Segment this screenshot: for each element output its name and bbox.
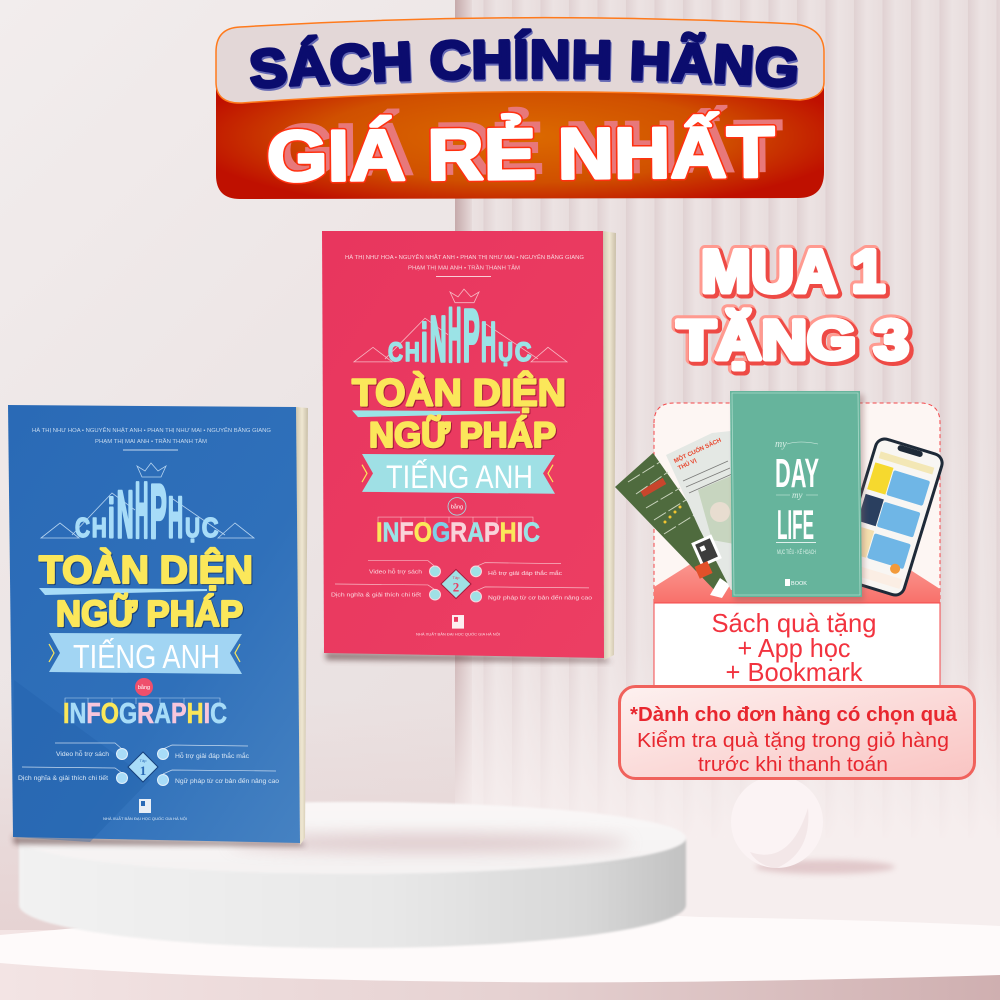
callout: gift notice — [620, 686, 974, 778]
red feature list: Video hỗ trợ sách — [369, 568, 422, 575]
red title: CHINH PHỤC: C — [515, 337, 531, 367]
feature list: Tập — [140, 758, 147, 763]
icon: green notebook: DAY — [775, 450, 819, 496]
floor — [0, 911, 1000, 1000]
ribbon: TIẾNG ANH: TIẾNG ANH — [73, 638, 220, 675]
gift caption panel — [654, 603, 940, 687]
blue book: volume 1 — [8, 405, 308, 846]
title: CHINH PHỤC: P — [150, 469, 167, 553]
red feature list: 2 — [453, 581, 459, 595]
heading: GIÁ RẺ NHẤT: GIÁ RẺ NHẤT — [266, 111, 775, 196]
red badge: bằng: bằng — [451, 503, 463, 510]
title: NGỮ PHÁP: NGỮ PHÁP — [56, 592, 243, 634]
icon: green notebook: MỤC TIÊU - KẾ HOẠCH — [777, 548, 816, 556]
red title: CHINH PHỤC: Ụ — [498, 338, 513, 368]
red crown and roof lines — [354, 289, 567, 362]
blue cover contents — [18, 427, 280, 821]
title: CHINH PHỤC: i — [108, 488, 115, 549]
badge: bằng — [135, 678, 153, 696]
red badge: bằng — [448, 498, 466, 515]
red book: volume 2 — [322, 231, 616, 662]
authors — [32, 427, 271, 450]
title: CHINH PHỤC — [75, 468, 218, 555]
feature list: Ngữ pháp từ cơ bản đến nâng cao — [175, 779, 280, 785]
title: CHINH PHỤC: H — [92, 513, 107, 544]
title: CHINH PHỤC: H — [135, 468, 148, 555]
red title: CHINH PHỤC: P — [463, 295, 480, 377]
icon: green notebook: my — [775, 439, 787, 450]
red ribbon: TIẾNG ANH: TIẾNG ANH — [386, 458, 533, 495]
authors: HÀ THỊ NHƯ HOA • NGUYỄN NHẬT ANH • PHAN THỊ NHƯ MAI • NGUYỄN BĂNG GIANG — [32, 427, 271, 434]
icon: photo bookmark: THÚ VỊ — [677, 457, 698, 472]
gift panel card — [654, 403, 940, 603]
title: CHINH PHỤC: C — [75, 513, 90, 544]
red publisher — [416, 615, 500, 636]
callout: gift notice: *Dành cho đơn hàng có chọn quà — [630, 703, 958, 726]
banner grey upper panel — [216, 18, 824, 103]
heading: GIÁ RẺ NHẤT: GIÁ RẺ NHẤT — [266, 111, 775, 196]
red authors: HÀ THỊ NHƯ HOA • NGUYỄN NHẬT ANH • PHAN THỊ NHƯ MAI • NGUYỄN BĂNG GIANG — [345, 254, 584, 261]
title: TOÀN DIỆN: TOÀN DIỆN — [39, 548, 253, 592]
heading: TẶNG 3: TẶNG 3 — [677, 308, 909, 371]
feature list: Hỗ trợ giải đáp thắc mắc — [175, 753, 249, 760]
title: CHINH PHỤC: H — [168, 486, 183, 550]
banner red lower panel — [216, 60, 824, 199]
red book shadow — [325, 652, 612, 662]
red feature list: Dịch nghĩa & giải thích chi tiết — [331, 593, 421, 599]
heading: TẶNG 3: TẶNG 3 — [677, 308, 909, 371]
red title: CHINH PHỤC — [388, 292, 531, 377]
heading: SÁCH CHÍNH HÃNG: SÁCH CHÍNH HÃNG — [250, 28, 798, 91]
icon: green notebook: BOOK — [791, 581, 808, 587]
heading: MUA 1: MUA 1 — [701, 238, 885, 305]
icon: green bookmark — [615, 453, 735, 598]
panel: gifts — [615, 391, 946, 687]
blue cover — [8, 405, 300, 843]
feature list — [18, 743, 280, 786]
gift caption panel: Sách quà tặng — [712, 608, 876, 638]
feature list: 1 — [140, 763, 146, 778]
red title underline — [352, 410, 520, 417]
red title: CHINH PHỤC: i — [421, 313, 428, 372]
red title: TOÀN DIỆN: TOÀN DIỆN — [352, 371, 566, 414]
red cover — [322, 231, 604, 658]
red book pages — [603, 231, 616, 660]
red feature list: Ngữ pháp từ cơ bản đến nâng cao — [488, 596, 593, 601]
icon: photo bookmark: MỘT CUỐN SÁCH — [672, 436, 722, 465]
icon: green notebook — [730, 391, 864, 601]
red authors — [345, 254, 584, 277]
feature list: Video hỗ trợ sách — [56, 751, 109, 758]
publisher: NHÀ XUẤT BẢN ĐẠI HỌC QUỐC GIA HÀ NỘI — [103, 816, 187, 821]
envelope flap — [654, 497, 940, 603]
callout: gift notice: Kiểm tra quà tặng trong giỏ hàng — [637, 729, 949, 752]
red title: CHINH PHỤC: H — [448, 292, 461, 377]
badge: bằng: bằng — [138, 684, 150, 691]
red authors: PHẠM THỊ MAI ANH • TRẦN THANH TÂM — [408, 265, 521, 272]
book shadow — [13, 836, 306, 846]
icon: green notebook: my — [792, 490, 802, 500]
icon: phone app — [834, 435, 946, 599]
title: CHINH PHỤC: Ụ — [185, 513, 200, 544]
red title: NGỮ PHÁP: NGỮ PHÁP — [369, 416, 556, 455]
red title: CHINH PHỤC: C — [388, 338, 403, 368]
banner — [215, 16, 825, 199]
decorative ball — [731, 776, 895, 874]
red title: CHINH PHỤC: H — [405, 338, 420, 368]
feature list: Dịch nghĩa & giải thích chi tiết — [18, 776, 108, 782]
gift caption panel: + Bookmark — [726, 657, 863, 687]
red feature list: Hỗ trợ giải đáp thắc mắc — [488, 570, 562, 577]
publisher — [103, 799, 187, 821]
icon: photo bookmark — [666, 430, 740, 590]
red feature list: Tập — [453, 575, 460, 580]
title: CHINH PHỤC: N — [117, 478, 133, 552]
heading: MUA 1: MUA 1 — [703, 240, 887, 307]
heading: TẶNG 3: TẶNG 3 — [679, 310, 911, 373]
gift caption panel: + App học — [738, 633, 850, 663]
red title: CHINH PHỤC: H — [481, 311, 496, 373]
title: INFOGRAPHIC: INFOGRAPHIC — [63, 698, 227, 730]
red title: CHINH PHỤC: N — [430, 305, 446, 376]
podium — [18, 802, 686, 948]
callout: gift notice: trước khi thanh toán — [698, 753, 888, 776]
crown and roof lines — [41, 463, 254, 538]
icon: green notebook: LIFE — [777, 501, 814, 548]
authors: PHẠM THỊ MAI ANH • TRẦN THANH TÂM — [95, 438, 207, 445]
red cover contents — [331, 254, 593, 636]
title: CHINH PHỤC: C — [202, 513, 218, 543]
red feature list — [331, 561, 593, 602]
title underline — [39, 588, 207, 595]
heading: MUA 1: MUA 1 — [701, 238, 885, 305]
book pages — [296, 407, 308, 845]
red publisher: NHÀ XUẤT BẢN ĐẠI HỌC QUỐC GIA HÀ NỘI — [416, 631, 500, 636]
heading: GIÁ RẺ NHẤT: GIÁ RẺ NHẤT — [274, 105, 782, 190]
red title: INFOGRAPHIC: INFOGRAPHIC — [376, 517, 540, 548]
